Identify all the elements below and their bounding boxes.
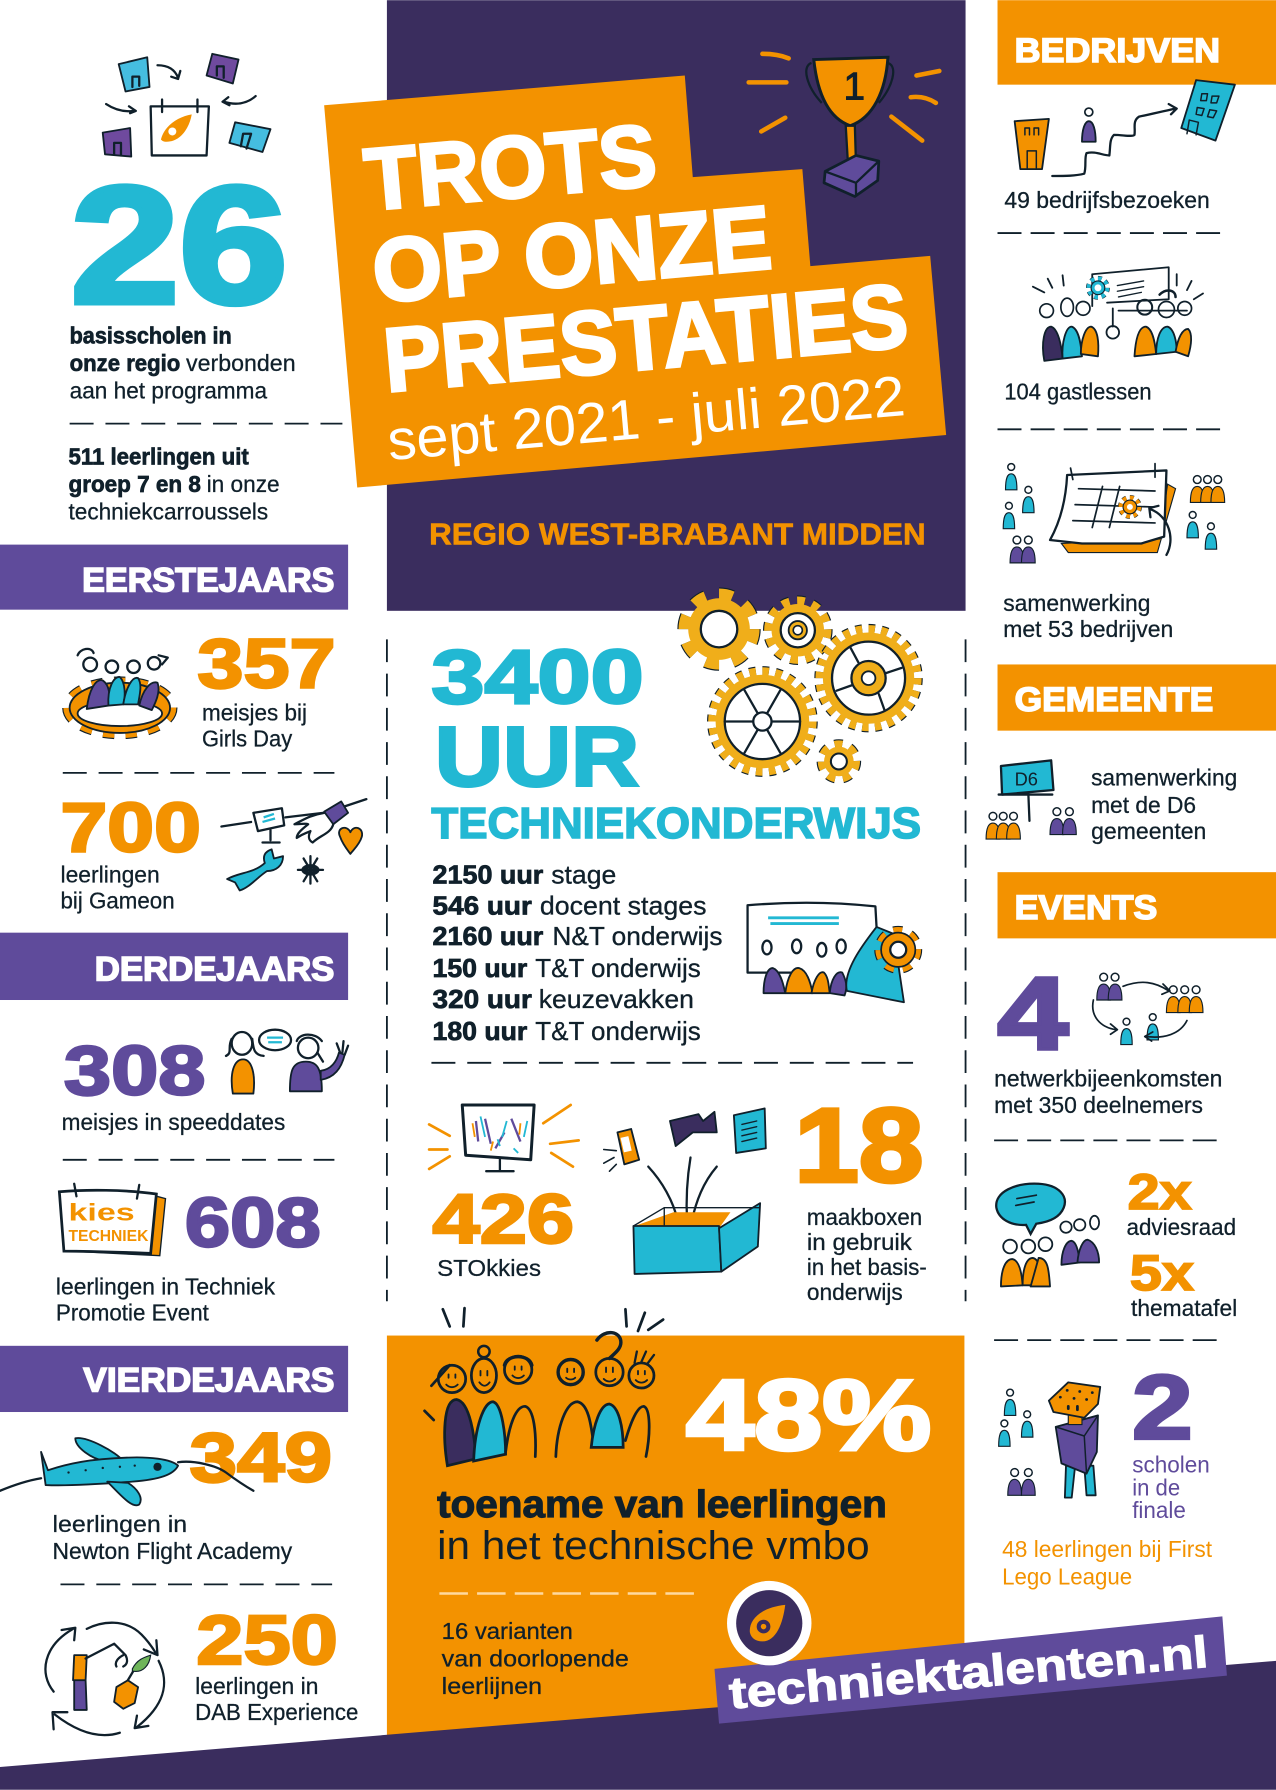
title: op onze: OP ONZE bbox=[368, 187, 775, 323]
text: d6 gemeenten: samenwerking bbox=[1091, 764, 1237, 790]
text: techniekcarroussels: in onze bbox=[207, 471, 280, 497]
heading band: eerstejaars bbox=[0, 545, 348, 610]
text: finale: finale bbox=[1132, 1497, 1186, 1523]
text: gameon: leerlingen bbox=[60, 861, 160, 887]
heading band: vierdejaars: VIERDEJAARS bbox=[83, 1361, 334, 1399]
text: samenwerking bedrijven: met 53 bedrijven bbox=[1003, 616, 1173, 642]
text: techniekcarroussels: techniekcarroussels bbox=[68, 499, 268, 525]
footer band bbox=[0, 1661, 1276, 1790]
icon: kies techniek sign bbox=[59, 1184, 165, 1256]
heading: techniekonderwijs: TECHNIEKONDERWIJS bbox=[431, 800, 921, 848]
icon: speech bubble group bbox=[996, 1184, 1099, 1286]
text: bedrijfsbezoeken: 49 bedrijfsbezoeken bbox=[1004, 187, 1210, 213]
text: newton flight academy: Newton Flight Academy bbox=[53, 1538, 293, 1564]
list: hours: 150 uur bbox=[433, 953, 527, 983]
text: dab experience: DAB Experience bbox=[195, 1699, 358, 1725]
heading band: events bbox=[998, 872, 1276, 938]
icon: network bbox=[1093, 973, 1203, 1045]
number: 308: 308 bbox=[64, 1032, 205, 1110]
panel: eerstejaars bbox=[0, 545, 366, 914]
dashed frame left bbox=[386, 639, 388, 1301]
text: varianten bbox=[442, 1618, 629, 1699]
number: 357: 357 bbox=[197, 624, 336, 702]
text: dab experience bbox=[195, 1673, 358, 1725]
text: maakboxen: onderwijs bbox=[807, 1279, 903, 1305]
icon: company visit bbox=[1015, 80, 1235, 176]
text: netwerk: netwerkbijeenkomsten bbox=[994, 1066, 1222, 1092]
text: d6 gemeenten: met de D6 bbox=[1091, 792, 1196, 818]
text: basisscholen: aan het programma bbox=[70, 378, 267, 404]
text: newton flight academy bbox=[53, 1511, 293, 1564]
text: promotie event bbox=[56, 1273, 276, 1326]
number: 2x: 2x bbox=[1128, 1164, 1192, 1220]
text: techniekcarroussels bbox=[68, 444, 280, 525]
text: techniekcarroussels: 511 leerlingen uit bbox=[68, 444, 249, 470]
heading band: vierdejaars bbox=[0, 1346, 348, 1412]
number: 2: 2 bbox=[1132, 1356, 1193, 1458]
title background shape bbox=[324, 76, 946, 488]
text: newton flight academy: leerlingen in bbox=[53, 1511, 187, 1537]
icon: d6 sign: D6 bbox=[1015, 768, 1038, 789]
text: d6 gemeenten: gemeenten bbox=[1091, 818, 1206, 844]
heading band: gemeente: GEMEENTE bbox=[1015, 681, 1213, 719]
list: hours bbox=[433, 860, 722, 1046]
panel: percentage block background bbox=[387, 1336, 964, 1746]
dashed frame right bbox=[965, 639, 967, 1301]
text: basisscholen bbox=[70, 323, 296, 404]
website banner bbox=[714, 1581, 1227, 1724]
icon: stokkies screen bbox=[429, 1105, 579, 1171]
text: dab experience: leerlingen in bbox=[195, 1673, 318, 1699]
list: hours: T&T onderwijs bbox=[535, 953, 701, 983]
title: prestaties: PRESTATIES bbox=[380, 265, 912, 412]
text: toename: toename van leerlingen bbox=[437, 1483, 887, 1525]
number: 48%: 48% bbox=[686, 1360, 931, 1472]
text: netwerk bbox=[994, 1066, 1222, 1118]
icon: speed date bbox=[226, 1030, 348, 1094]
list: hours: docent stages bbox=[540, 890, 706, 920]
icon: lego robot bbox=[999, 1382, 1100, 1498]
number: 4: 4 bbox=[998, 956, 1068, 1071]
text: adviesraad: adviesraad bbox=[1126, 1214, 1236, 1240]
number: 3400: 3400 bbox=[431, 635, 644, 720]
icon: airplane bbox=[0, 1438, 253, 1505]
heading band: bedrijven bbox=[998, 0, 1276, 85]
icon: maakbox bbox=[604, 1108, 766, 1274]
text: varianten: leerlijnen bbox=[442, 1673, 542, 1699]
number: 426: 426 bbox=[433, 1180, 574, 1258]
list: hours: 2160 uur bbox=[433, 921, 543, 951]
icon: d6 sign bbox=[986, 760, 1076, 839]
text: thematafel: thematafel bbox=[1131, 1295, 1237, 1321]
text: gameon bbox=[60, 861, 175, 914]
text: basisscholen: verbonden bbox=[186, 350, 296, 376]
banner shape bbox=[714, 1616, 1227, 1724]
panel: 48 percent bbox=[425, 1308, 931, 1699]
number: 18: 18 bbox=[794, 1087, 923, 1204]
icon: kies techniek sign: kies bbox=[68, 1199, 135, 1226]
website url: techniektalenten.nl bbox=[727, 1628, 1210, 1719]
panel: gemeente bbox=[986, 664, 1276, 844]
icon: girls around a gear bbox=[70, 649, 170, 733]
icon: circular robot arm bbox=[45, 1623, 164, 1735]
text: basisscholen: basisscholen in bbox=[70, 323, 232, 349]
icon: classroom presentation bbox=[748, 903, 918, 1002]
icon: guest lessons bbox=[1033, 267, 1203, 361]
heading band: bedrijven: BEDRIJVEN bbox=[1015, 32, 1220, 70]
text: netwerk: met 350 deelnemers bbox=[994, 1092, 1203, 1118]
icon: schools around a calendar bbox=[103, 54, 270, 157]
text: basisscholen: onze regio bbox=[70, 350, 180, 376]
text: samenwerking bedrijven bbox=[1003, 590, 1173, 642]
list: hours: 180 uur bbox=[433, 1016, 527, 1046]
panel: events bbox=[994, 872, 1276, 1589]
text: girls day: Girls Day bbox=[202, 726, 293, 752]
text: vmbo: in het technische vmbo bbox=[437, 1524, 870, 1568]
subtitle: date range: sept 2021 - juli 2022 bbox=[385, 364, 908, 473]
list: hours: 546 uur bbox=[433, 890, 532, 920]
text: varianten: van doorlopende bbox=[442, 1646, 629, 1672]
icon: calendar with people bbox=[1003, 464, 1225, 563]
big number: 26: 26 bbox=[71, 153, 288, 339]
list: hours: T&T onderwijs bbox=[535, 1016, 701, 1046]
icon: kies techniek sign: TECHNIEK bbox=[68, 1228, 149, 1245]
text: finale: scholen bbox=[1132, 1452, 1210, 1478]
text: first lego league: Lego League bbox=[1002, 1563, 1132, 1589]
logo bbox=[727, 1581, 811, 1665]
list: hours: keuzevakken bbox=[539, 984, 694, 1014]
heading: uur: UUR bbox=[435, 709, 639, 803]
icon: gears bbox=[684, 594, 918, 779]
number: 608: 608 bbox=[185, 1184, 321, 1262]
title: trots: TROTS bbox=[361, 105, 660, 229]
icon: students bbox=[425, 1308, 663, 1466]
text: first lego league: 48 leerlingen bij First bbox=[1002, 1536, 1213, 1562]
text: d6 gemeenten bbox=[1091, 764, 1237, 844]
text: stokkies: STOkkies bbox=[437, 1255, 541, 1281]
heading band: gemeente bbox=[998, 664, 1276, 731]
text: finale: in de bbox=[1132, 1474, 1180, 1500]
text: promotie event: leerlingen in Techniek bbox=[56, 1273, 276, 1299]
list: hours: stage bbox=[551, 860, 616, 890]
icon: trophy: 1 bbox=[843, 65, 865, 108]
text: gameon: bij Gameon bbox=[60, 888, 175, 914]
text: first lego league bbox=[1002, 1536, 1213, 1589]
text: speeddates: meisjes in speeddates bbox=[62, 1109, 285, 1135]
panel: header background bbox=[387, 0, 966, 611]
text: girls day bbox=[202, 699, 307, 752]
heading band: derdejaars bbox=[0, 933, 348, 1000]
text: gastlessen: 104 gastlessen bbox=[1004, 379, 1152, 405]
text: promotie event: Promotie Event bbox=[56, 1300, 209, 1326]
list: hours: N&T onderwijs bbox=[552, 921, 722, 951]
text: maakboxen: in het basis- bbox=[807, 1254, 927, 1280]
text: maakboxen: maakboxen bbox=[807, 1204, 922, 1230]
text: techniekcarroussels: groep 7 en 8 bbox=[68, 471, 201, 497]
text: girls day: meisjes bij bbox=[202, 699, 307, 725]
heading band: eerstejaars: EERSTEJAARS bbox=[82, 561, 334, 599]
panel: bedrijven bbox=[998, 0, 1276, 642]
number: 250: 250 bbox=[196, 1601, 338, 1679]
number: 5x: 5x bbox=[1130, 1245, 1194, 1301]
number: 349: 349 bbox=[189, 1419, 332, 1497]
icon: trophy bbox=[749, 54, 939, 197]
text: samenwerking bedrijven: samenwerking bbox=[1003, 590, 1150, 616]
panel: primary schools bbox=[68, 54, 342, 525]
heading band: derdejaars: DERDEJAARS bbox=[95, 951, 334, 989]
panel: derdejaars bbox=[0, 933, 348, 1326]
number: 700: 700 bbox=[60, 789, 201, 867]
heading band: events: EVENTS bbox=[1015, 889, 1157, 927]
icon: game tools bbox=[221, 799, 366, 890]
panel: 3400 uur techniekonderwijs bbox=[387, 594, 966, 1305]
list: hours: 320 uur bbox=[433, 984, 532, 1014]
subheading: regio: REGIO WEST-BRABANT MIDDEN bbox=[429, 517, 926, 552]
list: hours: 2150 uur bbox=[433, 860, 543, 890]
text: varianten: 16 varianten bbox=[442, 1618, 573, 1644]
panel: vierdejaars bbox=[0, 1346, 358, 1735]
text: maakboxen bbox=[807, 1204, 927, 1305]
panel: title bbox=[324, 54, 946, 552]
text: maakboxen: in gebruik bbox=[807, 1229, 913, 1255]
text: finale bbox=[1132, 1452, 1210, 1523]
